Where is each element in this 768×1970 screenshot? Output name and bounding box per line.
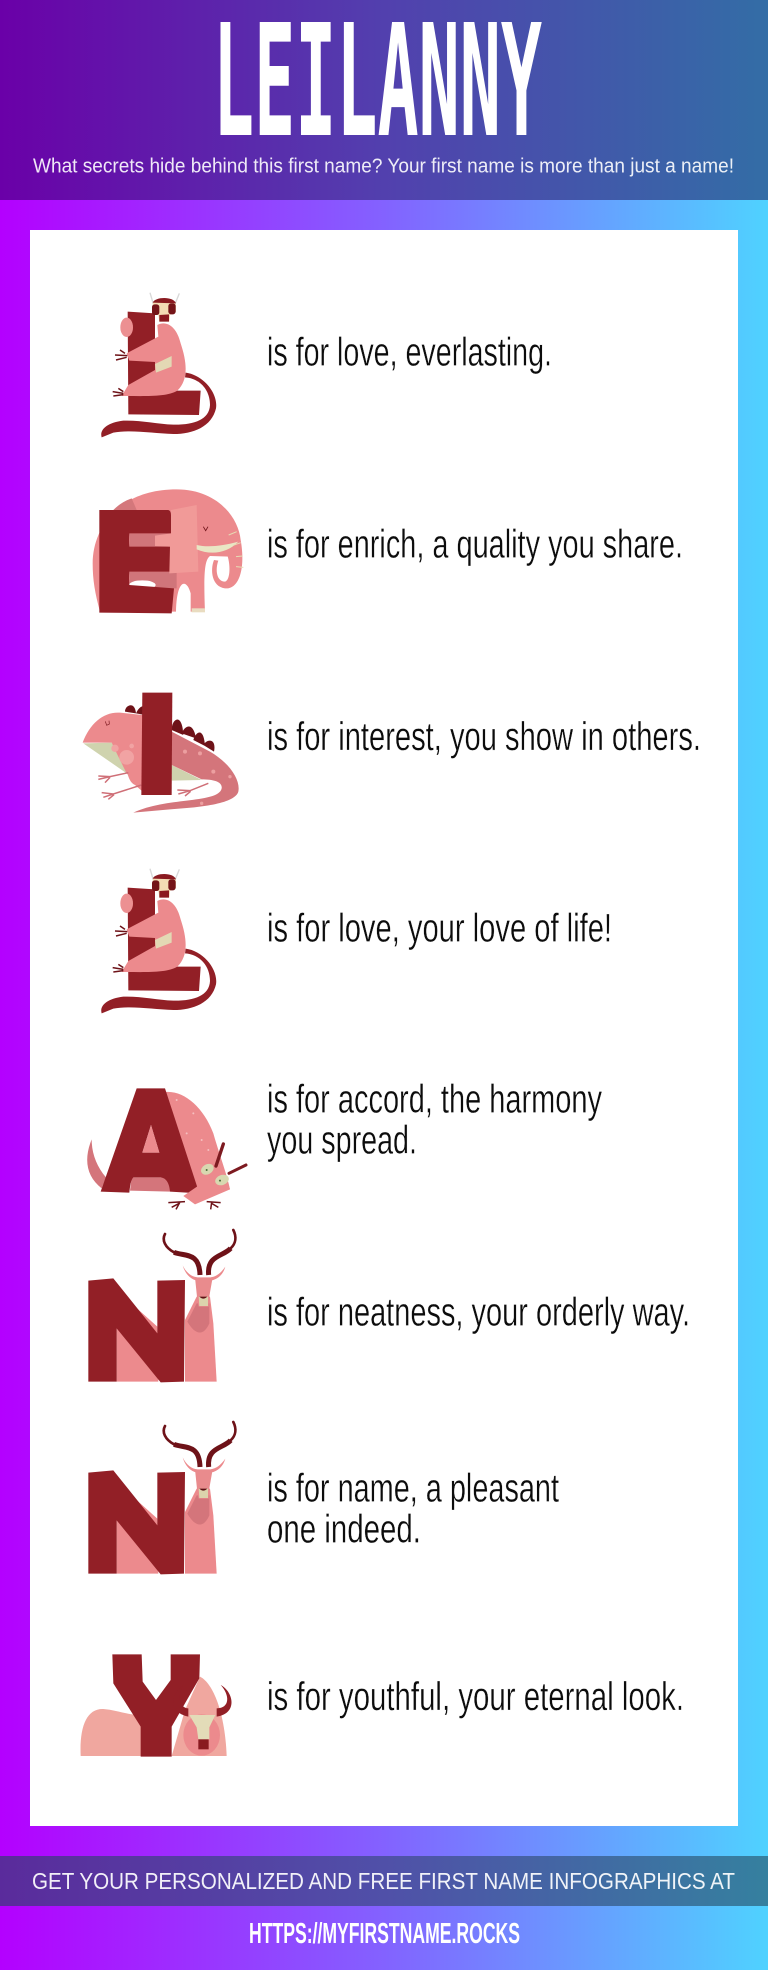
text	[267, 1467, 559, 1552]
row: N is for neatness	[88, 1230, 690, 1382]
subtitle: What secrets hide behind this first name? Your first name is more than just a name!	[33, 156, 734, 178]
icon: letter N gazelle	[88, 1422, 235, 1574]
icon: letter I iguana	[83, 693, 239, 813]
text: one indeed.	[267, 1508, 421, 1552]
header band	[0, 0, 768, 200]
icon: letter N gazelle	[88, 1230, 235, 1382]
row: L is for love, your love of life	[101, 869, 612, 1013]
icon: letter Y yak	[81, 1654, 232, 1757]
row: Y is for youthful	[81, 1654, 684, 1757]
icon: letter L monkey	[101, 869, 216, 1013]
icon: letter E elephant	[93, 489, 243, 613]
icon: letter L monkey	[101, 293, 216, 437]
text: is for love, everlasting.	[267, 331, 552, 375]
row: I is for interest	[83, 693, 701, 813]
icon: letter A armadillo	[87, 1088, 246, 1209]
white card panel	[30, 230, 738, 1826]
text: is for accord, the harmony	[267, 1077, 602, 1121]
footer url: HTTPS://MYFIRSTNAME.ROCKS	[249, 1918, 520, 1950]
footer band	[0, 1856, 768, 1906]
text	[267, 1077, 602, 1162]
text: is for love, your love of life!	[267, 907, 612, 951]
text: you spread.	[267, 1118, 417, 1162]
row: L is for love, everlasting	[101, 293, 552, 437]
text: is for name, a pleasant	[267, 1467, 559, 1511]
row: E is for enrich	[93, 489, 683, 613]
row: N is for name	[88, 1422, 559, 1574]
row: A is for accord	[87, 1077, 602, 1209]
